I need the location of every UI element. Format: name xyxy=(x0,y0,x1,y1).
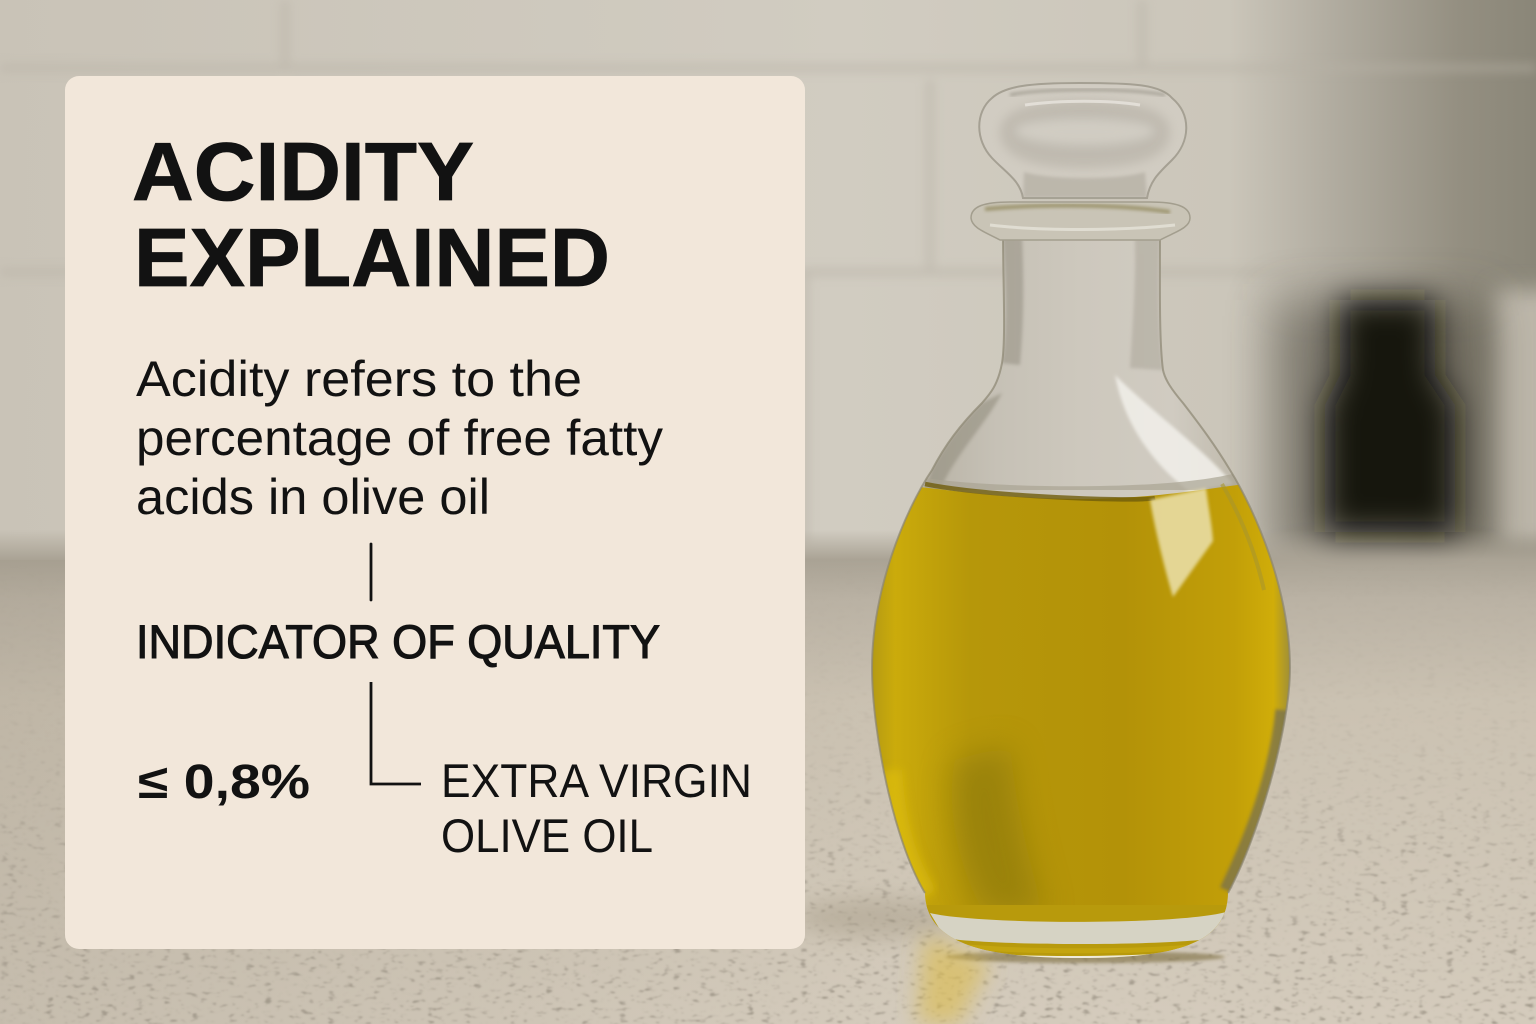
label: extra virgin olive oil: OLIVE OIL xyxy=(441,809,653,862)
background: speckled countertop xyxy=(0,530,1536,1024)
connector line: indicator to extra virgin xyxy=(371,682,421,784)
bottle shadow and oil glow on the countertop xyxy=(795,898,1225,1024)
bottle base xyxy=(926,905,1227,958)
heading: EXPLAINED xyxy=(134,211,610,304)
definition text xyxy=(136,351,663,525)
background: blurred kitchen wall xyxy=(0,0,1536,570)
olive oil xyxy=(860,476,1300,918)
background: shadow around dark bottle xyxy=(1275,300,1490,565)
label: extra virgin olive oil xyxy=(441,754,752,862)
background: dark blurred bottle xyxy=(1325,300,1455,532)
definition text: acids in olive oil xyxy=(136,469,490,525)
label: indicator of quality: INDICATOR OF QUALITY xyxy=(136,615,660,668)
definition text: Acidity refers to the xyxy=(136,351,582,407)
value: acidity threshold: ≤ 0,8% xyxy=(138,756,310,809)
bottle collar xyxy=(971,202,1190,240)
heading xyxy=(132,125,610,304)
glass bottle with olive oil xyxy=(860,83,1300,970)
panel: text card xyxy=(65,76,805,949)
connector line: definition to indicator xyxy=(370,544,372,600)
background: white canister on the right xyxy=(1495,290,1536,545)
bottle stopper xyxy=(979,83,1186,198)
definition text: percentage of free fatty xyxy=(136,410,663,466)
bottle outline xyxy=(872,236,1290,893)
label: extra virgin olive oil: EXTRA VIRGIN xyxy=(441,754,752,807)
heading: ACIDITY xyxy=(132,125,474,218)
bottle body glass xyxy=(860,230,1300,970)
